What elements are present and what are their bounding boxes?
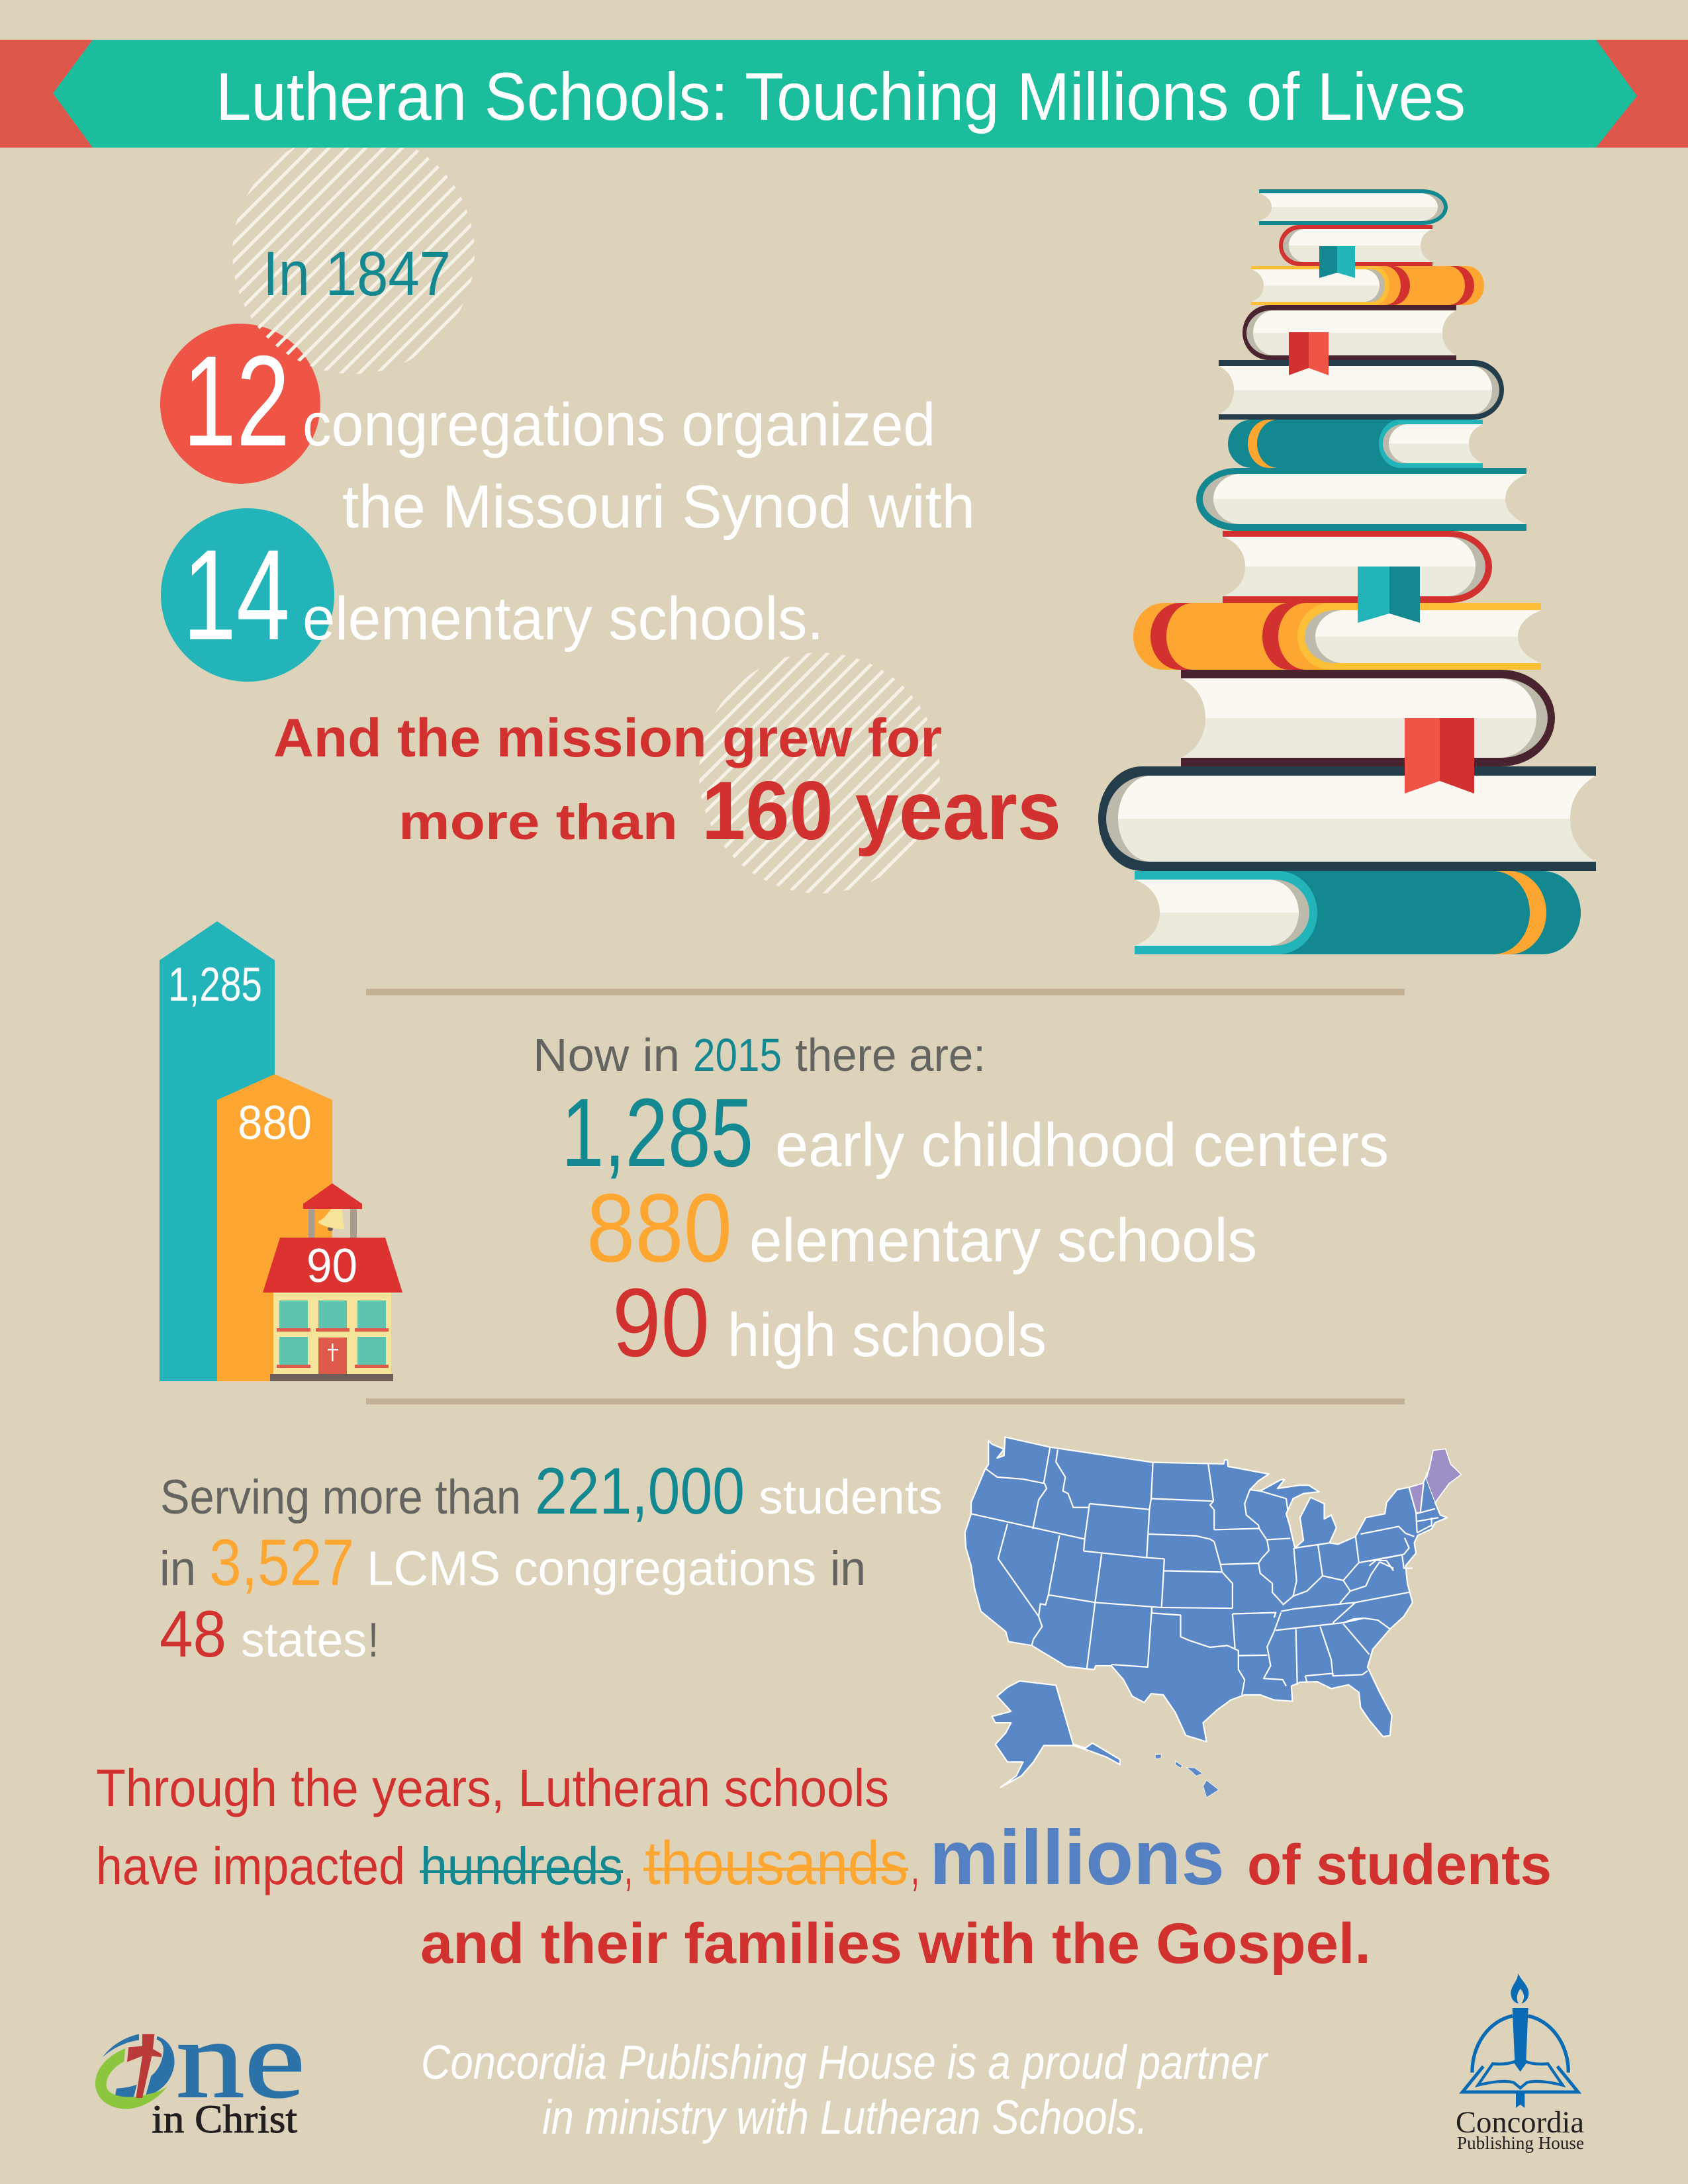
line: 48 states! [160,1597,379,1670]
partner statement: in ministry with Lutheran Schools. [542,2091,1148,2144]
book 1 [1259,189,1448,225]
book 11 [1098,766,1596,871]
hatched circle behind In 1847 [232,132,475,374]
line: 48 states!: ! [368,1614,379,1667]
line: in 3,527 LCMS congregations in: 3,527 [209,1525,354,1599]
book 9 [1133,603,1541,670]
Now in 2015 heading: there are: [795,1029,986,1081]
book 10 [1181,670,1555,766]
line: Serving more than 221,000 students: students [759,1471,943,1524]
line: Serving more than 221,000 students: Serving more than [160,1471,521,1524]
Now in 2015 heading: Now in [533,1029,680,1081]
map: Hawaii [1155,1754,1219,1797]
illustration: stack of books [1098,189,1596,954]
line: Serving more than 221,000 students [160,1454,943,1527]
And the mission grew for: And the mission grew for [273,708,942,768]
partner statement: Concordia Publishing House is a proud partner [421,2036,1269,2089]
closing statement text block [96,1758,1552,1976]
logo: One in Christ: in Christ [152,2097,297,2141]
line: in 3,527 LCMS congregations in: in [160,1542,196,1596]
history text block [183,239,1061,857]
line: 48 states!: 48 [160,1597,226,1670]
hatched circle behind 160 years [699,653,940,893]
1,285 early childhood centers: 1,285 [561,1079,753,1187]
book 2 [1279,225,1432,266]
bar: 880 [217,1074,332,1381]
divider [366,989,1405,995]
book 12 [1135,871,1581,954]
90 high schools [612,1269,1047,1377]
logo: Concordia Publishing House: Publishing House [1457,2133,1584,2153]
have impacted line: hundreds [420,1837,623,1895]
line: in 3,527 LCMS congregations in: in [830,1542,866,1596]
logo mark [95,2034,175,2109]
number circle: 14 [161,508,334,682]
1,285 early childhood centers: early childhood centers [775,1111,1389,1179]
divider [366,1398,1405,1404]
bar chart: school counts [160,921,402,1381]
12: 12 [183,329,290,473]
90 high schools: 90 [612,1269,710,1377]
bookmark: small red [1289,332,1329,375]
line: in 3,527 LCMS congregations in: LCMS congregations [367,1542,816,1596]
line: Serving more than 221,000 students: 221,000 [535,1454,745,1527]
number circle: 12 [160,324,320,484]
have impacted line: have impacted [96,1837,405,1895]
the Missouri Synod with: the Missouri Synod with [342,473,975,541]
bookmark: medium teal [1358,567,1420,623]
line: 48 states!: states [241,1614,367,1667]
bar: 1,285 [160,921,275,1381]
book 6 [1228,420,1483,468]
map: United States [965,1437,1461,1797]
map: Alaska [992,1681,1120,1788]
book 8 [1223,531,1492,603]
line: in 3,527 LCMS congregations in [160,1525,866,1599]
logo: One in Christ: ne [176,1998,305,2121]
book 4 [1243,305,1456,360]
logo: One in Christ [95,1998,305,2141]
2015 stats text block [533,1029,1389,1377]
title banner [0,40,1688,148]
bookmark: small teal [1319,246,1355,278]
congregations organized: congregations organized [303,391,935,459]
map: contiguous states [965,1437,1461,1742]
90 high schools: high schools [727,1300,1047,1369]
Through the years line: Through the years, Lutheran schools [96,1758,889,1817]
and their families line: and their families with the Gospel. [420,1912,1371,1976]
elementary schools.: elementary schools. [303,585,823,653]
book 5 [1219,360,1504,420]
have impacted line: , [911,1837,919,1895]
880 elementary schools: elementary schools [749,1206,1257,1275]
bookmark: large red [1405,718,1474,794]
have impacted line: thousands [645,1829,908,1897]
have impacted line: of students [1247,1833,1552,1897]
1,285 early childhood centers [561,1079,1389,1187]
more than: more than [399,794,678,850]
14: 14 [183,523,290,667]
book 3 [1251,266,1484,305]
map: Vermont and Maine highlighted [1409,1449,1461,1512]
partner statement [421,2036,1269,2144]
In 1847: In 1847 [263,239,451,309]
have impacted line: millions [929,1814,1225,1901]
880 elementary schools [586,1174,1257,1283]
have impacted line [96,1814,1552,1901]
bar: 1,285: 1,285 [168,958,262,1011]
880 elementary schools: 880 [586,1174,732,1283]
icon: schoolhouse: 90 [306,1240,357,1293]
logo: Concordia Publishing House [1456,1974,1584,2153]
have impacted line: , [624,1837,633,1895]
book 7 [1196,468,1526,531]
logo mark: candle and book [1462,1974,1578,2108]
160 years: 160 years [702,765,1061,857]
students and congregations text block [160,1454,943,1670]
title: Lutheran Schools: Touching Millions of Lives [216,59,1466,134]
Now in 2015 heading: 2015 [693,1029,782,1081]
map: state borders [971,1447,1438,1695]
bar: 880: 880 [238,1097,312,1150]
logo: Concordia Publishing House: Concordia [1456,2105,1584,2140]
icon: schoolhouse [263,1183,402,1381]
Now in 2015 heading [533,1029,986,1081]
